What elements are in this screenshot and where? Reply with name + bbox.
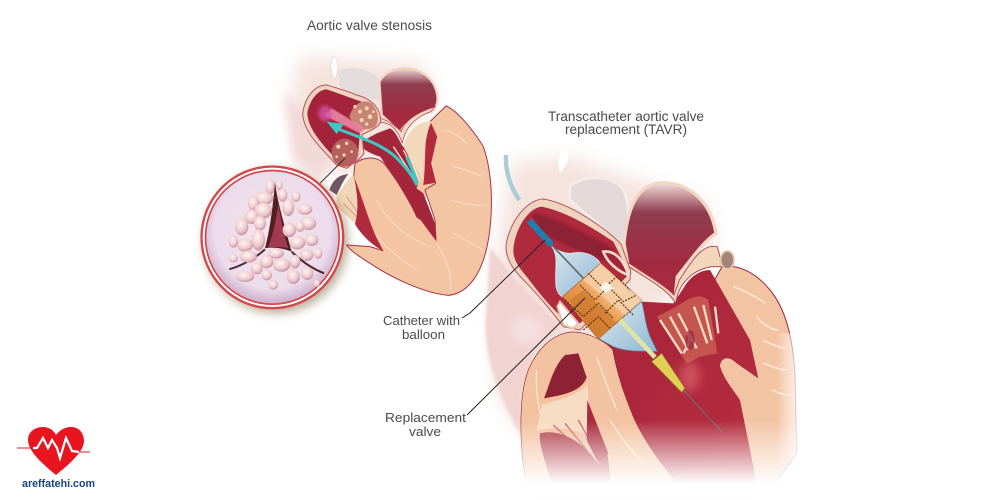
inner shaft upper xyxy=(552,245,585,280)
grey upper vessel xyxy=(570,178,629,243)
vessel notch xyxy=(331,56,338,80)
replacement valve xyxy=(563,263,642,339)
leader: valve xyxy=(467,298,585,415)
ventricle muscle xyxy=(347,106,491,295)
illustration: lower heart with TAVR xyxy=(463,147,810,500)
inset: calcified valve circle xyxy=(200,165,348,313)
inset rings xyxy=(200,165,344,309)
aorta interior xyxy=(513,207,627,323)
logo: areffatehi xyxy=(17,427,95,490)
chordae region xyxy=(657,296,717,363)
catheter shaft blue xyxy=(529,221,552,245)
vessel notch xyxy=(559,147,569,173)
logo pulse line xyxy=(33,438,79,458)
cream leaflet region xyxy=(403,121,432,184)
papillary glow xyxy=(680,362,700,392)
title: TAVR: Transcatheter aortic valve xyxy=(548,109,704,124)
muscle grain right xyxy=(733,287,792,395)
lower left chamber dark xyxy=(544,353,587,398)
faded left lobe xyxy=(485,247,560,440)
chordae strands xyxy=(660,305,718,353)
aorta wall xyxy=(506,199,631,330)
label: replacement valve xyxy=(385,410,466,439)
yellow shaft xyxy=(618,318,655,357)
valve ridge xyxy=(627,246,723,303)
right dark red wall xyxy=(423,122,437,185)
label: catheter with balloon xyxy=(383,313,460,342)
right atrium xyxy=(379,68,438,133)
grey upper vessel xyxy=(338,68,380,100)
callout leader to inset xyxy=(320,158,345,183)
lower left chordae xyxy=(537,383,607,451)
aorta wall xyxy=(303,85,381,168)
muscle grain xyxy=(370,130,487,290)
aorta interior xyxy=(307,89,378,165)
title: TAVR: replacement (TAVR) xyxy=(565,122,687,137)
label: catheter with balloon: Catheter with xyxy=(383,313,460,328)
logo heart xyxy=(28,427,84,475)
calcified leaflet lower xyxy=(332,139,358,167)
septal red sliver xyxy=(587,400,608,463)
calcification specks xyxy=(335,105,375,158)
lower left red xyxy=(540,432,613,500)
main ventricle cavity xyxy=(598,270,758,500)
right ventricle muscle xyxy=(703,266,797,500)
left wall fade xyxy=(285,93,333,180)
blood flow arrow xyxy=(327,122,417,185)
gap filler behind channel xyxy=(403,120,438,200)
balloon upper xyxy=(552,247,601,297)
right fade xyxy=(777,333,803,500)
label: catheter with balloon: balloon xyxy=(402,327,445,342)
logo text: areffatehi.com xyxy=(22,478,95,490)
lower left cream xyxy=(337,175,357,223)
valve opening xyxy=(265,182,292,252)
dark purple chamber xyxy=(329,174,348,195)
chordae shadow xyxy=(685,330,695,350)
label: replacement valve: Replacement xyxy=(385,410,466,425)
label: replacement valve: valve xyxy=(409,424,441,439)
illustration: upper heart with stenosis xyxy=(285,56,491,295)
title: TAVR xyxy=(548,109,704,137)
guide wire xyxy=(683,390,722,432)
bottom fade xyxy=(463,420,810,500)
valve ridge upper xyxy=(378,107,435,143)
native leaflet lower xyxy=(557,302,578,328)
lobe highlight xyxy=(510,317,543,343)
title: aortic valve stenosis: Aortic valve stenosis xyxy=(307,18,432,33)
leader: catheter xyxy=(462,240,545,318)
commissure creases xyxy=(229,249,324,273)
aorta dark band xyxy=(532,213,617,260)
faded heart background xyxy=(493,157,717,440)
coronary node xyxy=(721,251,734,269)
valve opening inner xyxy=(268,203,288,248)
calcified nodules xyxy=(229,179,322,290)
catheter tube xyxy=(506,155,519,200)
native leaflet upper xyxy=(603,252,628,275)
yellow catheter tip xyxy=(652,353,685,392)
faded heart background xyxy=(290,57,437,180)
septum muscle xyxy=(521,332,690,500)
pale outer left band xyxy=(332,187,370,263)
red channel xyxy=(358,128,436,240)
septum grain xyxy=(536,357,643,463)
lower left red sliver xyxy=(354,177,383,251)
balloon lower xyxy=(598,302,657,352)
right atrium xyxy=(624,183,716,301)
pink jet xyxy=(323,108,365,133)
chordae upper xyxy=(393,147,420,182)
jet magenta xyxy=(318,105,332,121)
lower left chordae xyxy=(343,197,358,217)
logo pulse tails xyxy=(17,448,90,452)
inset shadow xyxy=(204,169,348,313)
calcified leaflet upper xyxy=(349,101,378,129)
